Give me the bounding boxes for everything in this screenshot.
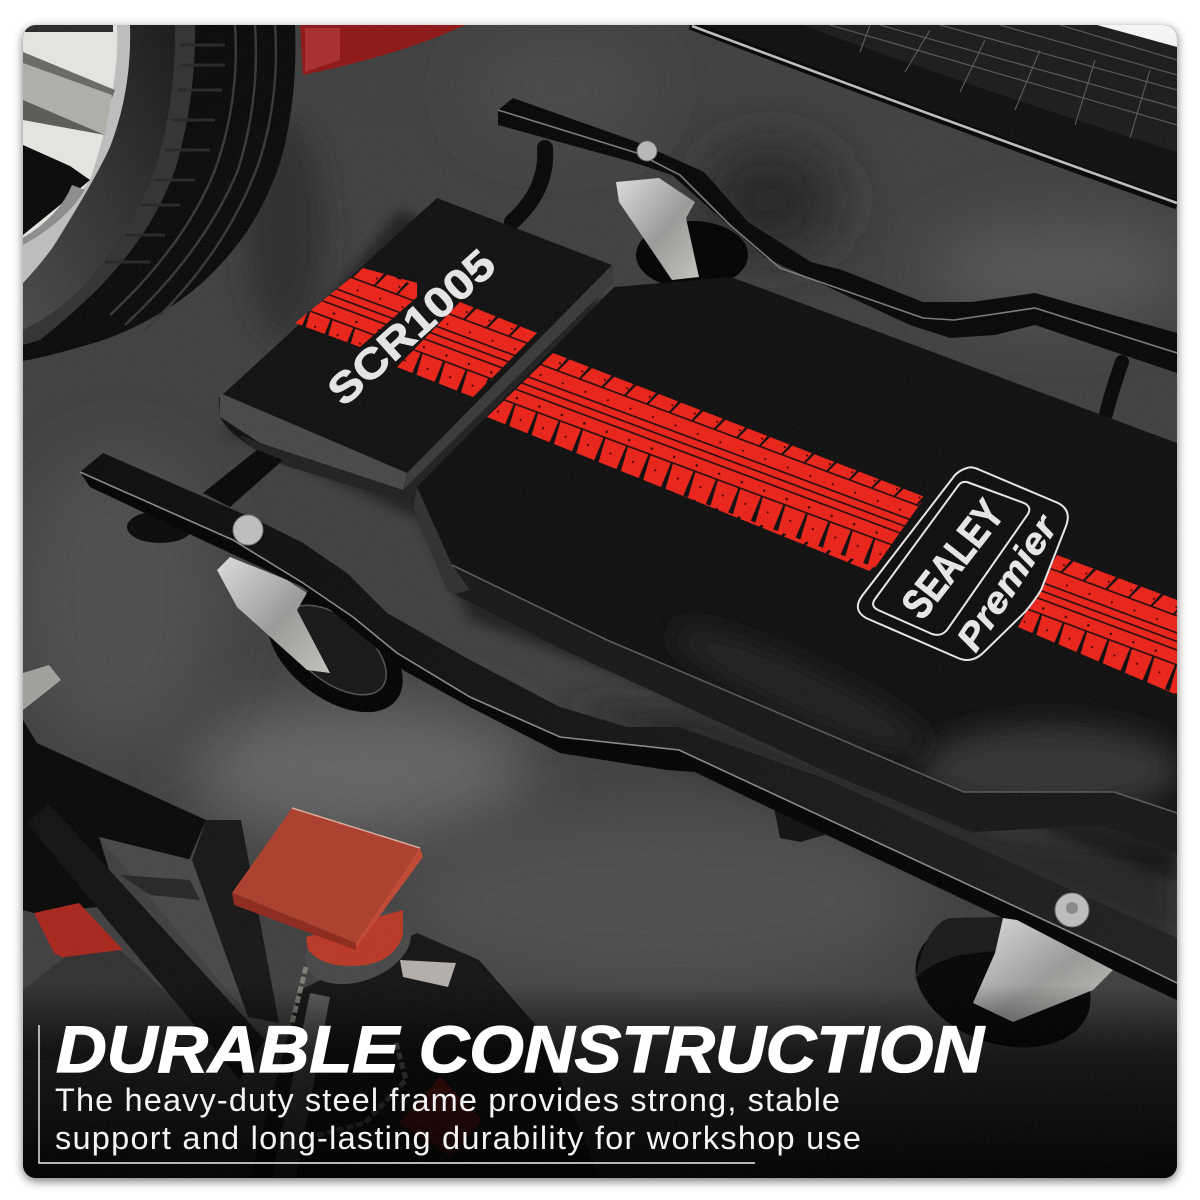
main padded body	[413, 277, 1180, 860]
caption frame	[39, 1025, 755, 1163]
front left bolt	[233, 515, 263, 545]
front right caster wheel	[915, 892, 1113, 1048]
red tyre tread print: head rest left	[295, 268, 417, 347]
top rail bolt	[637, 141, 657, 161]
front steel frame rail	[80, 453, 1177, 1000]
Sealey Premier logo	[858, 467, 1068, 660]
red tyre tread print: right	[1018, 555, 1177, 695]
car underside with grille	[690, 25, 1177, 205]
front left caster wheel	[217, 557, 403, 712]
axle stand, left	[23, 665, 279, 1080]
rear top caster wheel	[616, 178, 748, 289]
red tyre tread print: main	[487, 353, 925, 572]
Sealey Premier logo: Premier	[948, 506, 1066, 658]
bottom dark gradient behind caption	[23, 985, 1177, 1178]
head rest cushion	[219, 198, 613, 500]
car tyre and alloy wheel	[23, 25, 465, 361]
red tyre tread print: head rest right	[397, 302, 537, 397]
rail foot	[774, 808, 825, 842]
Sealey Premier logo: SEALEY	[892, 491, 1013, 627]
body text	[55, 1082, 861, 1156]
creeper shadow	[225, 210, 1177, 880]
body text: The heavy-duty steel frame provides strong, stable	[55, 1082, 840, 1118]
top steel frame rail	[498, 98, 1177, 373]
model name SCR1005: SCR1005	[318, 240, 504, 414]
heading: DURABLE CONSTRUCTION	[56, 1012, 985, 1086]
body text: support and long-lasting durability for workshop use	[55, 1120, 861, 1156]
front cross bar and rear wheel	[127, 450, 283, 543]
top rail support legs	[512, 148, 1122, 414]
axle stand, centre with red head	[232, 807, 576, 1156]
